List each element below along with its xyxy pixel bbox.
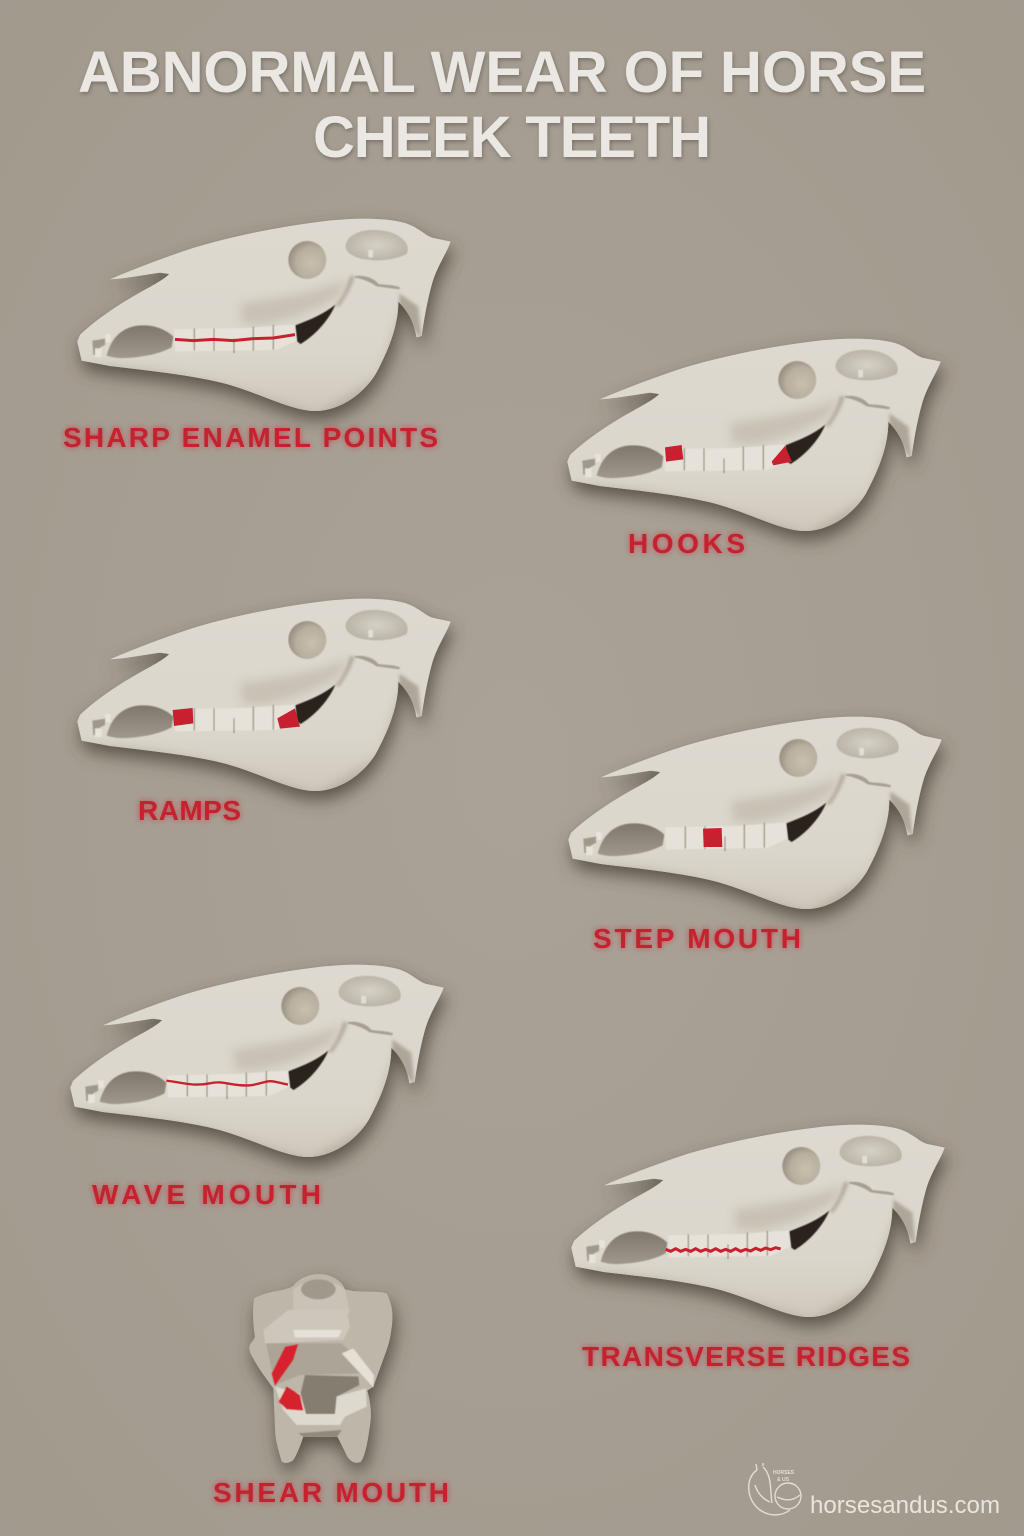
panel: step mouth skull	[564, 717, 942, 921]
logo: horses and us: HORSES	[773, 1470, 795, 1476]
title	[78, 40, 926, 170]
ramps red teeth	[173, 708, 300, 729]
title: CHEEK TEETH	[313, 105, 711, 170]
title: ABNORMAL WEAR OF HORSE	[78, 40, 926, 105]
logo: horses and us	[749, 1463, 1000, 1519]
label: wave mouth: WAVE MOUTH	[92, 1179, 321, 1210]
panel: transverse ridges skull	[567, 1125, 945, 1329]
panel: ramps skull	[73, 599, 451, 803]
transverse ridges red line	[666, 1248, 781, 1251]
panel: sharp enamel points skull	[73, 219, 451, 423]
label: sharp enamel points: SHARP ENAMEL POINTS	[63, 422, 438, 453]
logo icon	[749, 1463, 801, 1515]
panel: wave mouth skull	[66, 965, 444, 1169]
website url: horsesandus.com	[810, 1492, 1000, 1519]
label: hooks: HOOKS	[628, 528, 745, 559]
logo: horses and us: & US	[777, 1477, 790, 1483]
wave mouth red line	[166, 1081, 288, 1085]
step mouth red tooth	[703, 828, 722, 847]
label: transverse ridges: TRANSVERSE RIDGES	[582, 1341, 910, 1372]
panel: hooks skull	[563, 339, 941, 543]
sharp enamel points red line	[175, 335, 295, 341]
panel: shear mouth front-view skull	[249, 1274, 392, 1463]
label: ramps: RAMPS	[138, 795, 241, 826]
label: step mouth: STEP MOUTH	[593, 923, 801, 954]
shear mouth red teeth	[272, 1344, 303, 1411]
label: shear mouth: SHEAR MOUTH	[213, 1477, 449, 1508]
hooks red teeth	[665, 445, 792, 465]
